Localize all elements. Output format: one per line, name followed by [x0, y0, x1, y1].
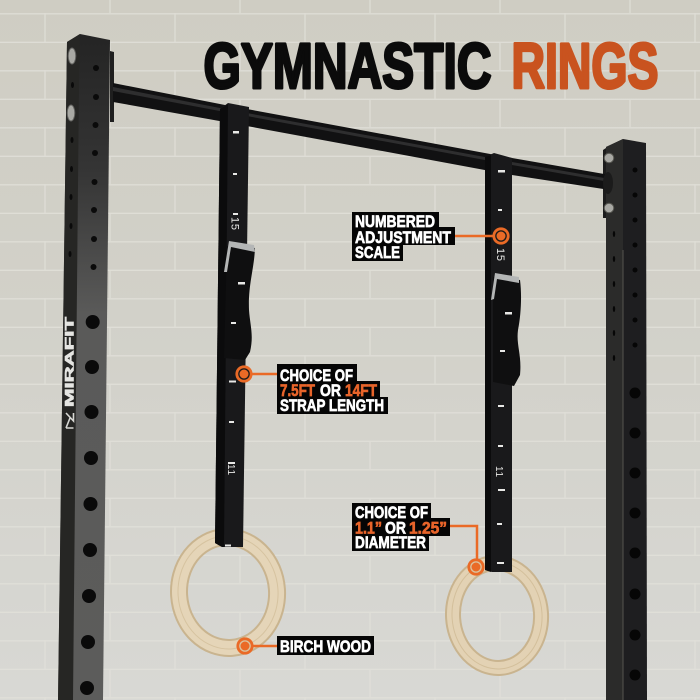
marker dot	[238, 639, 252, 653]
holes: large lower row	[80, 315, 100, 695]
label text: OR	[320, 381, 341, 400]
label text: CHOICE OF	[355, 503, 428, 522]
label box	[352, 503, 450, 551]
left strap number 11: 11	[225, 464, 236, 475]
callout: birch wood	[238, 636, 374, 656]
leader line	[450, 526, 477, 560]
leader line	[455, 235, 493, 237]
callout: diameter	[352, 503, 483, 574]
pull-up bar	[113, 83, 613, 194]
left strap number 15: 15	[228, 217, 240, 230]
label text: DIAMETER	[355, 533, 426, 552]
title	[204, 30, 658, 102]
marker dot	[237, 367, 251, 381]
right ring	[448, 559, 546, 672]
label text: SCALE	[355, 243, 400, 262]
label text: STRAP LENGTH	[280, 396, 384, 415]
left buckle	[224, 241, 255, 272]
right post holes	[613, 168, 640, 680]
label box	[277, 364, 388, 414]
holes: small upper row	[68, 65, 99, 270]
label text: 14FT	[345, 381, 377, 400]
callout: strap length	[237, 364, 388, 415]
label text: 7.5FT	[280, 381, 315, 400]
right strap ticks	[497, 170, 512, 564]
bolts on right post	[604, 153, 614, 213]
label text	[355, 503, 447, 552]
right upright post	[603, 139, 647, 700]
label text: BIRCH WOOD	[280, 637, 371, 656]
right strap	[485, 153, 521, 572]
label box	[277, 636, 374, 655]
right strap number 15: 15	[494, 248, 506, 261]
left upright post	[58, 34, 114, 700]
label text: 1.1”	[355, 518, 382, 538]
callout: numbered adjustment scale	[352, 212, 508, 262]
marker dot	[494, 229, 508, 243]
left ring	[174, 533, 282, 652]
title word: Gymnastic: GYMNASTIC	[204, 30, 492, 102]
left strap loop	[224, 246, 255, 360]
leader line	[253, 645, 277, 647]
brand logo mark	[66, 413, 74, 428]
label text: OR	[385, 518, 406, 538]
right buckle	[491, 273, 519, 300]
left strap ticks	[225, 131, 245, 546]
marker dot	[469, 560, 483, 574]
label text: 1.25”	[409, 518, 447, 538]
label text: NUMBERED	[355, 212, 435, 231]
right strap number 11: 11	[493, 466, 504, 477]
left strap	[215, 103, 255, 547]
label text	[280, 366, 384, 415]
bolts	[67, 48, 76, 121]
label text: ADJUSTMENT	[355, 228, 452, 247]
leader line	[252, 373, 277, 375]
label box	[352, 212, 455, 261]
label text: CHOICE OF	[280, 366, 353, 385]
brand text: Mirafit: MIRAFIT	[62, 316, 76, 407]
label text	[355, 212, 452, 262]
right strap loop	[493, 277, 521, 386]
